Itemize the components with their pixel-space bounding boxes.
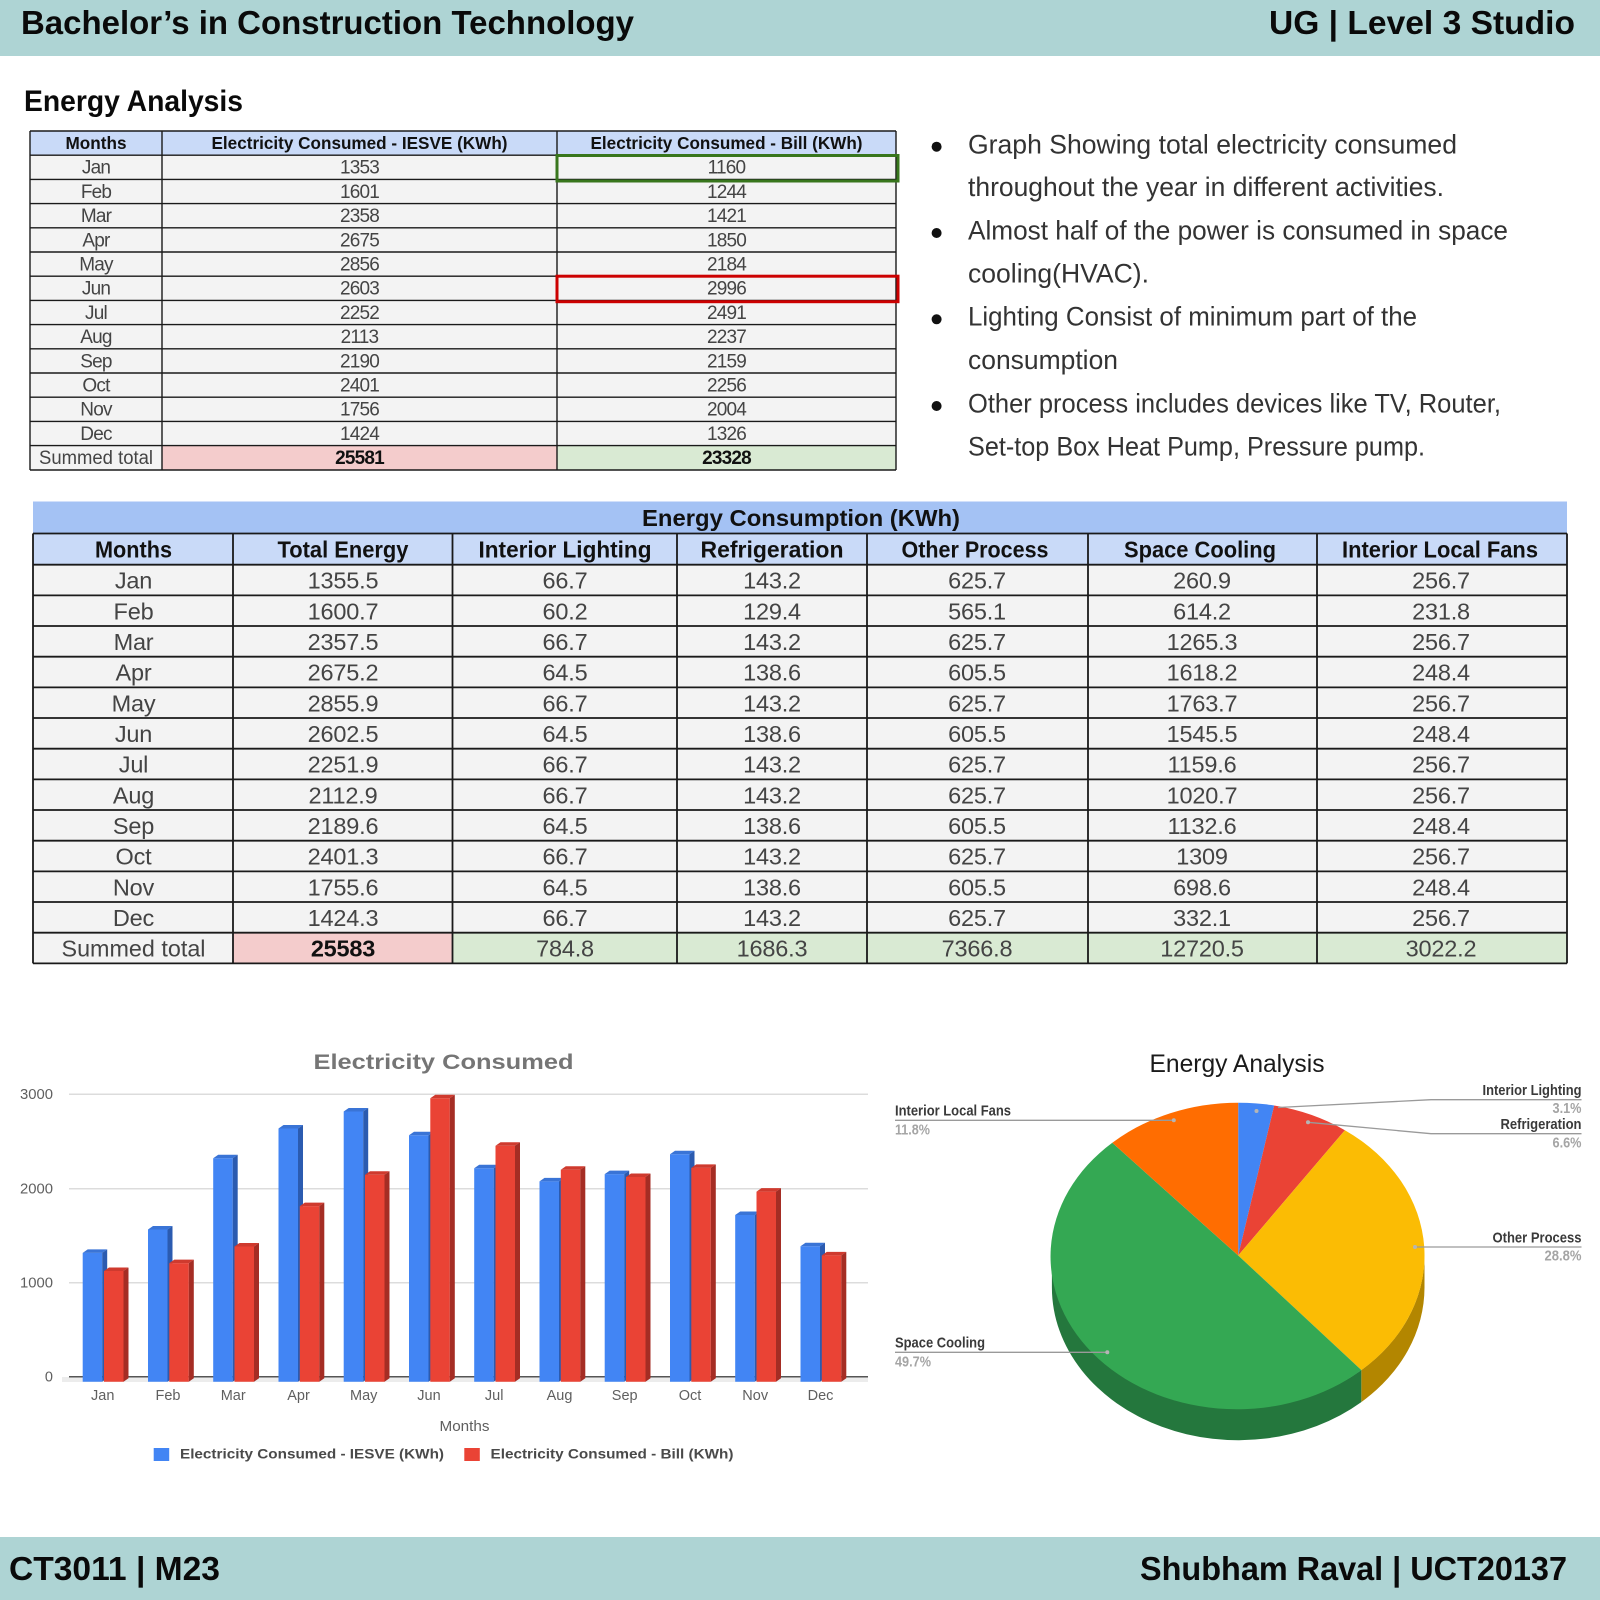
table rows: 698.6 (1173, 874, 1231, 900)
summed total row (62, 936, 1476, 962)
table rows: 256.7 (1412, 568, 1470, 594)
chart title: Electricity Consumed (314, 1051, 574, 1074)
table rows: 1309 (1176, 844, 1228, 870)
table rows: 143.2 (743, 844, 801, 870)
table header row: Electricity Consumed - Bill (KWh) (590, 133, 862, 153)
table rows: 2491 (707, 303, 746, 324)
section heading: Energy Analysis (24, 85, 243, 118)
y axis: 0 (45, 1370, 53, 1386)
label: interior local fans: 11.8% (895, 1121, 930, 1138)
table rows: 1755.6 (308, 874, 378, 900)
table rows: 1601 (340, 182, 379, 203)
table rows: 625.7 (948, 905, 1006, 931)
label: other process: Other Process (1492, 1229, 1582, 1246)
table rows: 256.7 (1412, 629, 1470, 655)
x axis labels: Apr (287, 1388, 310, 1404)
label: space cooling: Space Cooling (895, 1335, 985, 1352)
summed total row: Summed total (62, 936, 206, 962)
table rows: 1424.3 (308, 905, 378, 931)
table rows: 2675 (340, 230, 379, 251)
bullet list: Almost half of the power is consumed in space (968, 215, 1508, 245)
table rows: 2602.5 (308, 721, 378, 747)
table rows: 1355.5 (308, 568, 378, 594)
label: interior lighting: 3.1% (1552, 1100, 1582, 1117)
table rows: 605.5 (948, 721, 1006, 747)
table rows: Sep (113, 813, 154, 839)
bullet list: Set-top Box Heat Pump, Pressure pump. (968, 431, 1425, 461)
table rows: 2855.9 (308, 690, 378, 716)
table rows: Mar (81, 206, 113, 227)
table rows: 2190 (340, 351, 379, 372)
table rows: 248.4 (1412, 813, 1470, 839)
table rows: 565.1 (948, 598, 1006, 624)
table rows: Apr (82, 230, 111, 251)
bullet list: Lighting Consist of minimum part of the (968, 302, 1417, 332)
table rows: 2251.9 (308, 752, 378, 778)
table rows: 625.7 (948, 568, 1006, 594)
y axis: 2000 (20, 1182, 53, 1198)
table rows: 2401.3 (308, 844, 378, 870)
x axis labels: Mar (221, 1388, 246, 1404)
bullet list: Other process includes devices like TV, Router, (968, 388, 1501, 418)
x axis labels: Oct (679, 1388, 701, 1404)
table rows: 1421 (707, 206, 746, 227)
bullet list: cooling(HVAC). (968, 259, 1149, 289)
table rows: 625.7 (948, 752, 1006, 778)
x axis labels: Dec (808, 1388, 833, 1404)
table rows: 2401 (340, 376, 379, 396)
footer course code: CT3011 | M23 (9, 1550, 220, 1587)
bars: Electricity Consumed - IESVE (83, 1108, 825, 1382)
table rows: Aug (80, 327, 112, 348)
summed total row: 25581 (335, 448, 385, 469)
table title: Energy Consumption (KWh) (642, 505, 960, 531)
table rows: 64.5 (543, 721, 588, 747)
table rows: Feb (81, 182, 111, 203)
table rows: 1326 (707, 424, 746, 445)
table rows: 66.7 (543, 905, 587, 931)
header title left: Bachelor’s in Construction Technology (21, 4, 635, 41)
bar chart: electricity consumed (20, 1051, 868, 1462)
table rows: Oct (116, 844, 152, 870)
summed total row (39, 448, 751, 469)
table rows: 143.2 (743, 629, 801, 655)
table rows: 66.7 (543, 782, 587, 808)
x axis labels: Sep (612, 1388, 638, 1404)
table rows: 605.5 (948, 813, 1006, 839)
table rows: Mar (114, 629, 154, 655)
table rows: 2603 (340, 279, 379, 300)
table rows: Jan (115, 568, 152, 594)
table rows: Apr (116, 660, 152, 686)
table rows: 2113 (341, 327, 379, 348)
bullet list: throughout the year in different activities. (968, 172, 1444, 202)
table rows (112, 568, 1470, 931)
pie chart: energy analysis (895, 1050, 1582, 1440)
table rows: 1618.2 (1167, 660, 1237, 686)
table rows: 231.8 (1412, 598, 1470, 624)
table rows: Feb (114, 598, 154, 624)
bullet list: Graph Showing total electricity consumed (968, 129, 1457, 159)
table rows: 2252 (340, 303, 379, 324)
bullet list (932, 129, 1508, 461)
table rows: Jul (119, 752, 148, 778)
table rows: Nov (80, 400, 113, 421)
table rows: Jun (82, 279, 110, 300)
table rows: 143.2 (743, 568, 801, 594)
table rows: 2856 (340, 254, 379, 276)
x axis labels (91, 1388, 833, 1404)
table rows: 625.7 (948, 690, 1006, 716)
table rows: 1353 (340, 158, 379, 179)
table rows: 256.7 (1412, 690, 1470, 716)
label: interior local fans: Interior Local Fans (895, 1103, 1011, 1120)
label: refrigeration: 6.6% (1552, 1134, 1582, 1151)
table rows: Dec (113, 905, 155, 931)
summed total row: 23328 (702, 448, 751, 469)
x axis labels: Jun (417, 1388, 441, 1404)
table rows: 256.7 (1412, 844, 1470, 870)
table rows: 2256 (707, 376, 746, 396)
table rows: 64.5 (543, 813, 588, 839)
table rows: 605.5 (948, 874, 1006, 900)
x axis labels: Jul (485, 1388, 503, 1404)
table rows: Oct (82, 376, 111, 396)
table rows: May (112, 690, 156, 716)
label: space cooling: 49.7% (895, 1354, 931, 1371)
table rows: Nov (113, 874, 155, 900)
table rows: 1424 (340, 424, 380, 445)
table rows: 1756 (340, 400, 379, 421)
table header row: Months (66, 133, 127, 153)
table rows: 1850 (707, 230, 746, 251)
table rows: 256.7 (1412, 782, 1470, 808)
table column headers: Other Process (902, 537, 1048, 563)
x axis labels: Jan (91, 1388, 114, 1404)
highlight: lowest bill month (557, 156, 898, 181)
table rows: 64.5 (543, 874, 588, 900)
table rows: Jan (82, 158, 110, 179)
summed total row: 3022.2 (1406, 936, 1476, 962)
highlight: highest bill month (557, 276, 898, 302)
y axis (20, 1087, 868, 1386)
table column headers: Total Energy (278, 537, 409, 563)
label: other process: 28.8% (1544, 1248, 1582, 1265)
table rows: 2112.9 (309, 782, 377, 808)
table column headers: Months (95, 537, 172, 563)
table rows: 2358 (340, 206, 379, 227)
bullet list: consumption (968, 345, 1118, 375)
table: energy consumption by end use (33, 502, 1567, 963)
table rows: 138.6 (743, 874, 801, 900)
label: interior local fans (895, 1103, 1011, 1138)
table rows: 2004 (707, 400, 747, 421)
table rows: 143.2 (743, 905, 801, 931)
table rows: 1600.7 (308, 598, 378, 624)
x axis labels: Feb (156, 1388, 180, 1404)
pie slices (1051, 1103, 1425, 1440)
label: interior lighting: Interior Lighting (1482, 1082, 1582, 1099)
table rows: 138.6 (743, 660, 801, 686)
table rows: May (79, 254, 114, 276)
label: refrigeration (1500, 1116, 1582, 1151)
x axis labels: Aug (547, 1388, 572, 1404)
table rows: Aug (113, 782, 154, 808)
header band (0, 0, 1600, 56)
table rows: 1160 (708, 158, 746, 179)
table rows: 2357.5 (308, 629, 378, 655)
pie title: Energy Analysis (1150, 1050, 1324, 1078)
table rows: 2675.2 (308, 660, 378, 686)
table rows: 1244 (707, 182, 747, 203)
x axis labels: May (350, 1388, 378, 1404)
table rows: 64.5 (543, 660, 588, 686)
table rows: 2159 (707, 351, 746, 372)
table rows: 66.7 (543, 690, 587, 716)
table rows: 1545.5 (1167, 721, 1237, 747)
footer author: Shubham Raval | UCT20137 (1140, 1550, 1567, 1587)
footer band (0, 1537, 1600, 1600)
table rows: 66.7 (543, 844, 587, 870)
table header row: Electricity Consumed - IESVE (KWh) (212, 133, 508, 153)
table rows: Jul (85, 303, 107, 324)
table rows: 625.7 (948, 844, 1006, 870)
table rows: 143.2 (743, 690, 801, 716)
table rows: 143.2 (743, 752, 801, 778)
label: refrigeration: Refrigeration (1500, 1116, 1582, 1133)
table rows: 1763.7 (1167, 690, 1237, 716)
leader lines (895, 1100, 1582, 1352)
table column headers: Interior Local Fans (1342, 537, 1538, 563)
table rows: 260.9 (1173, 568, 1231, 594)
table rows: 66.7 (543, 752, 587, 778)
leader anchor dots (1105, 1109, 1417, 1354)
table rows: 2189.6 (308, 813, 378, 839)
table rows: 256.7 (1412, 905, 1470, 931)
table rows: 605.5 (948, 660, 1006, 686)
table rows: 332.1 (1173, 905, 1231, 931)
table rows: 256.7 (1412, 752, 1470, 778)
table rows: 1265.3 (1167, 629, 1237, 655)
table rows: 1159.6 (1168, 752, 1237, 778)
table rows: 248.4 (1412, 874, 1470, 900)
table rows: 143.2 (743, 782, 801, 808)
summed total row: 25583 (311, 936, 375, 962)
table column headers: Interior Lighting (478, 537, 652, 563)
table: monthly electricity IESVE vs bill (30, 131, 898, 470)
table column headers (95, 537, 1538, 563)
label: interior lighting (1482, 1082, 1582, 1117)
table rows: 1132.6 (1168, 813, 1237, 839)
summed total row: 1686.3 (737, 936, 807, 962)
label: other process (1492, 1229, 1582, 1265)
table rows: 60.2 (543, 598, 587, 624)
table rows: 2996 (707, 279, 746, 300)
table rows: 625.7 (948, 782, 1006, 808)
summed total row: Summed total (39, 448, 153, 469)
table rows: 625.7 (948, 629, 1006, 655)
bars: Electricity Consumed - Bill (104, 1095, 846, 1382)
table rows: Sep (80, 351, 112, 372)
x axis title: Months (440, 1419, 490, 1435)
y axis: 1000 (20, 1276, 53, 1292)
summed total row: 784.8 (536, 936, 594, 962)
legend: Electricity Consumed - Bill (KWh) (490, 1446, 734, 1462)
table header row (66, 133, 862, 153)
table rows (79, 158, 747, 445)
header title right: UG | Level 3 Studio (1269, 4, 1575, 41)
table rows: 129.4 (743, 598, 801, 624)
table rows: 248.4 (1412, 660, 1470, 686)
summed total row: 12720.5 (1160, 936, 1244, 962)
table rows: 138.6 (743, 721, 801, 747)
legend: Electricity Consumed - IESVE (KWh) (180, 1446, 444, 1462)
table rows: 614.2 (1173, 598, 1231, 624)
table rows: 1020.7 (1167, 782, 1237, 808)
table rows: 66.7 (543, 568, 587, 594)
table column headers: Refrigeration (700, 537, 844, 563)
label: space cooling (895, 1335, 985, 1371)
x axis labels: Nov (742, 1388, 769, 1404)
legend (154, 1446, 733, 1462)
table rows: 2237 (707, 327, 746, 348)
table rows: Jun (115, 721, 152, 747)
y axis: 3000 (20, 1087, 53, 1103)
table column headers: Space Cooling (1124, 537, 1276, 563)
table rows: 66.7 (543, 629, 587, 655)
summed total row: 7366.8 (942, 936, 1012, 962)
table rows: 2184 (707, 254, 747, 276)
table rows: 138.6 (743, 813, 801, 839)
table rows: Dec (80, 424, 112, 445)
table rows: 248.4 (1412, 721, 1470, 747)
